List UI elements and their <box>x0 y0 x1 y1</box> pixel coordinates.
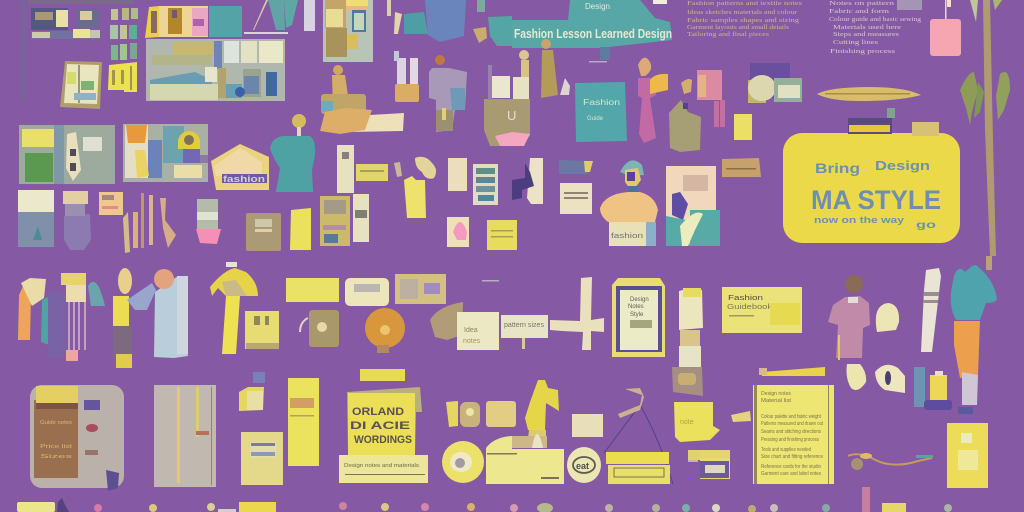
panel: framed document: Design <box>630 297 649 303</box>
icon: yellow oddments row <box>446 401 516 427</box>
icon: cream ovals <box>846 364 905 393</box>
callout: large yellow panel: Bring <box>815 160 860 176</box>
icon: folded yellow note: note <box>680 419 694 426</box>
figure: seated golden figure <box>320 65 404 134</box>
callout: large yellow panel: Design <box>875 158 930 173</box>
text block: top right notes: Steps and measures <box>833 32 900 38</box>
icon: glass vase <box>63 191 91 250</box>
icon: round badge <box>567 447 601 483</box>
icon: folded yellow note <box>674 402 720 442</box>
panel: yellow document card: Fashion <box>728 295 763 302</box>
panel: long yellow notes page: Reference cards for the studio <box>761 464 821 470</box>
icon: grey dress on a person <box>429 55 467 132</box>
icon: tan bag with cards <box>430 280 548 350</box>
text block: top right notes: Fabric and form <box>829 8 890 15</box>
icon: cream note <box>448 158 467 191</box>
icon: small yellow label <box>356 164 388 181</box>
panel: long yellow notes page <box>731 367 834 484</box>
icon: framed window card <box>245 311 279 349</box>
icon: cream rounded pillow <box>345 278 389 306</box>
icon: blue and yellow block <box>559 160 593 174</box>
figure: person in teal hoodie and orange trousers <box>951 256 997 414</box>
icon: orange sun disc <box>365 308 405 353</box>
icon: small yellow box with bird <box>239 372 265 411</box>
panel: teal and orange card <box>123 124 208 182</box>
figure: pink robed woman <box>638 58 668 143</box>
panel: small yellow flyer <box>947 423 988 488</box>
illustration: tall plant <box>960 0 1010 256</box>
icon: long golden canoe <box>817 87 921 101</box>
callout: large yellow panel: MA STYLE <box>811 185 941 215</box>
panel: grey suitcase machine: Guide notes <box>40 420 73 426</box>
figure: teal bag and blue robe <box>387 0 512 46</box>
icon: cream note with writing <box>560 183 592 214</box>
icon: small yellow card <box>734 114 752 140</box>
icon: teal swatch sheet <box>473 164 498 205</box>
icon: pink hanging tag <box>930 0 961 56</box>
panel: long yellow notes page: Pressing and finishing process <box>761 437 819 443</box>
icon: yellow notepad <box>108 62 137 92</box>
panel: framed document <box>612 278 665 357</box>
icon: cream tall card <box>337 145 354 193</box>
panel: grey suitcase machine <box>30 385 124 491</box>
panel: grey suitcase machine: Price list <box>40 444 73 450</box>
icon: pink jacket <box>681 70 725 127</box>
panel: teal title banner: Fashion Lesson Learned Design <box>514 26 672 41</box>
panel: peach poster with teal foot <box>666 166 720 246</box>
icon: tan tools bundle <box>123 193 176 253</box>
panel: grey suitcase machine: Sizes <box>40 454 73 460</box>
icon: brown book <box>246 213 281 251</box>
figure: teal bust <box>270 114 315 192</box>
figure group: hanging clothes rack <box>18 273 105 361</box>
panel: yellow document card <box>722 287 802 333</box>
icon: cream tilted sheet <box>18 190 54 247</box>
panel: framed document: Notes <box>628 304 644 310</box>
icon: yellow booklet <box>290 208 311 250</box>
text block: top centre notes: Tailoring and final pieces <box>687 31 770 38</box>
panel: long yellow notes page: Patterns measured and drawn out <box>761 421 823 427</box>
panel: long yellow notes page: Seams and stitching directions <box>761 429 821 435</box>
icon: tan bag with cards: notes <box>463 338 481 345</box>
icon: tan portrait clock <box>300 310 339 347</box>
figure: teal legs at top <box>244 0 315 34</box>
panel: long yellow notes page: Garment care and label notes <box>761 471 821 477</box>
icon: yellow hammer lamp <box>210 262 258 354</box>
icon: yellow note <box>487 220 517 250</box>
icon: framed picture <box>60 61 102 109</box>
panel: top-left board <box>21 0 133 100</box>
icon: yellow oil can <box>512 380 559 448</box>
panel: yellow poster with text: WORDINGS <box>354 434 412 446</box>
figure: woman in teal hat <box>600 160 658 246</box>
icon: pink shell on cream card <box>447 217 469 247</box>
panel: yellow poster with text: Design notes and materials <box>344 463 420 469</box>
figure: person with lamp and box <box>484 50 530 146</box>
text block: top right notes <box>829 0 922 55</box>
panel: long yellow notes page: Material list <box>761 398 792 404</box>
panel: long yellow notes page: Tools and supplies needed <box>761 447 811 453</box>
panel: colourful strip <box>145 6 242 38</box>
icon: yellow ticket <box>286 278 339 302</box>
row: bottom edge bottles and cards <box>17 487 952 512</box>
panel: teal title banner: Design <box>585 2 610 11</box>
icon: yellow shirt and shell <box>394 157 436 218</box>
text block: top right notes: Colour guide and basic sewing <box>829 17 921 23</box>
icon: teal poster: Guide <box>587 116 604 122</box>
icon: pink pot <box>196 199 221 244</box>
figure: woman in teal hat: fashion <box>611 233 643 240</box>
icon: tall yellow menu card <box>288 378 319 466</box>
icon: tall folded card column <box>672 288 703 396</box>
text block: top centre notes: Fabric samples shapes and sizing <box>687 18 799 24</box>
panel: yellow poster with text <box>339 369 428 483</box>
icon: cream egg <box>876 303 899 332</box>
callout: large yellow panel: now on the way <box>814 215 904 225</box>
icon: tan box <box>722 158 761 177</box>
text block: top right notes: Notes on pattern <box>829 1 894 7</box>
panel: teal title banner <box>512 0 672 62</box>
icon: small press machine <box>688 450 730 479</box>
text block: top centre notes: Garment layouts and small details <box>687 25 790 31</box>
panel: long yellow notes page: Design notes <box>761 391 792 397</box>
icon: yellow envelope tag <box>211 144 269 190</box>
callout: large yellow panel <box>783 108 960 243</box>
icon: peach label <box>99 192 123 215</box>
icon: dark cabinet with folded clothes <box>748 63 802 103</box>
panel: long yellow notes page: Colour palette and fabric weight <box>761 414 822 420</box>
text block: top right notes: Cutting lines <box>833 40 879 46</box>
icon: yellow envelope tag: fashion <box>223 174 265 184</box>
panel: yellow poster with text: ORLAND <box>352 406 404 418</box>
panel: framed document: Style <box>630 312 644 318</box>
text block: top centre notes <box>687 1 803 38</box>
icon: khaki vest <box>669 100 701 152</box>
text block: top centre notes: Ideas sketches materials and colour <box>687 10 797 16</box>
panel: green tile grid <box>110 8 138 60</box>
panel: twin pamphlets <box>320 194 369 246</box>
icon: small critter branch <box>848 453 933 470</box>
panel: yellow poster with text: DI ACIE <box>350 420 410 432</box>
panel: yellow document card: Guidebook <box>727 304 773 311</box>
icon: teal poster: Fashion <box>583 98 620 107</box>
icon: round badge: eat <box>576 461 589 471</box>
panel: tan framed picture <box>395 274 446 304</box>
icon: basket with bottles <box>394 51 419 102</box>
panel: cream and tan poster <box>323 0 373 62</box>
icon: tan bag with cards: Idea <box>464 327 478 334</box>
callout: large yellow panel: go <box>916 220 936 231</box>
figure: person in pink robe <box>828 275 870 360</box>
icon: tan bag with cards: pattern sizes <box>504 322 545 329</box>
panel: large map collage <box>146 39 285 101</box>
icon: white striped tube <box>921 268 941 352</box>
icon: cream cross <box>550 277 604 350</box>
icon: grey wardrobe doors <box>154 385 216 487</box>
text block: top right notes: Materials used here <box>833 25 901 31</box>
icon: yellow ticket card <box>486 436 564 484</box>
icon: cream card and dark figure <box>512 158 543 204</box>
icon: yellow ring disc <box>442 441 484 483</box>
icon: jar and blue stand <box>914 367 952 410</box>
figure: person with lamp and box: U <box>507 108 516 123</box>
icon: cream envelope card <box>241 432 283 485</box>
figure: tan robed person <box>541 39 570 98</box>
panel: grey-green card left <box>19 125 115 184</box>
icon: hanger with yellow box <box>604 388 673 484</box>
text block: top centre notes: Fashion patterns and textile notes <box>687 1 803 7</box>
icon: cream small card <box>572 414 603 437</box>
figure: grey-robed person with mask <box>113 268 188 368</box>
text block: top right notes: Finishing process <box>830 49 896 55</box>
panel: long yellow notes page: Size chart and fitting reference <box>761 454 823 460</box>
icon: teal poster <box>575 82 627 142</box>
